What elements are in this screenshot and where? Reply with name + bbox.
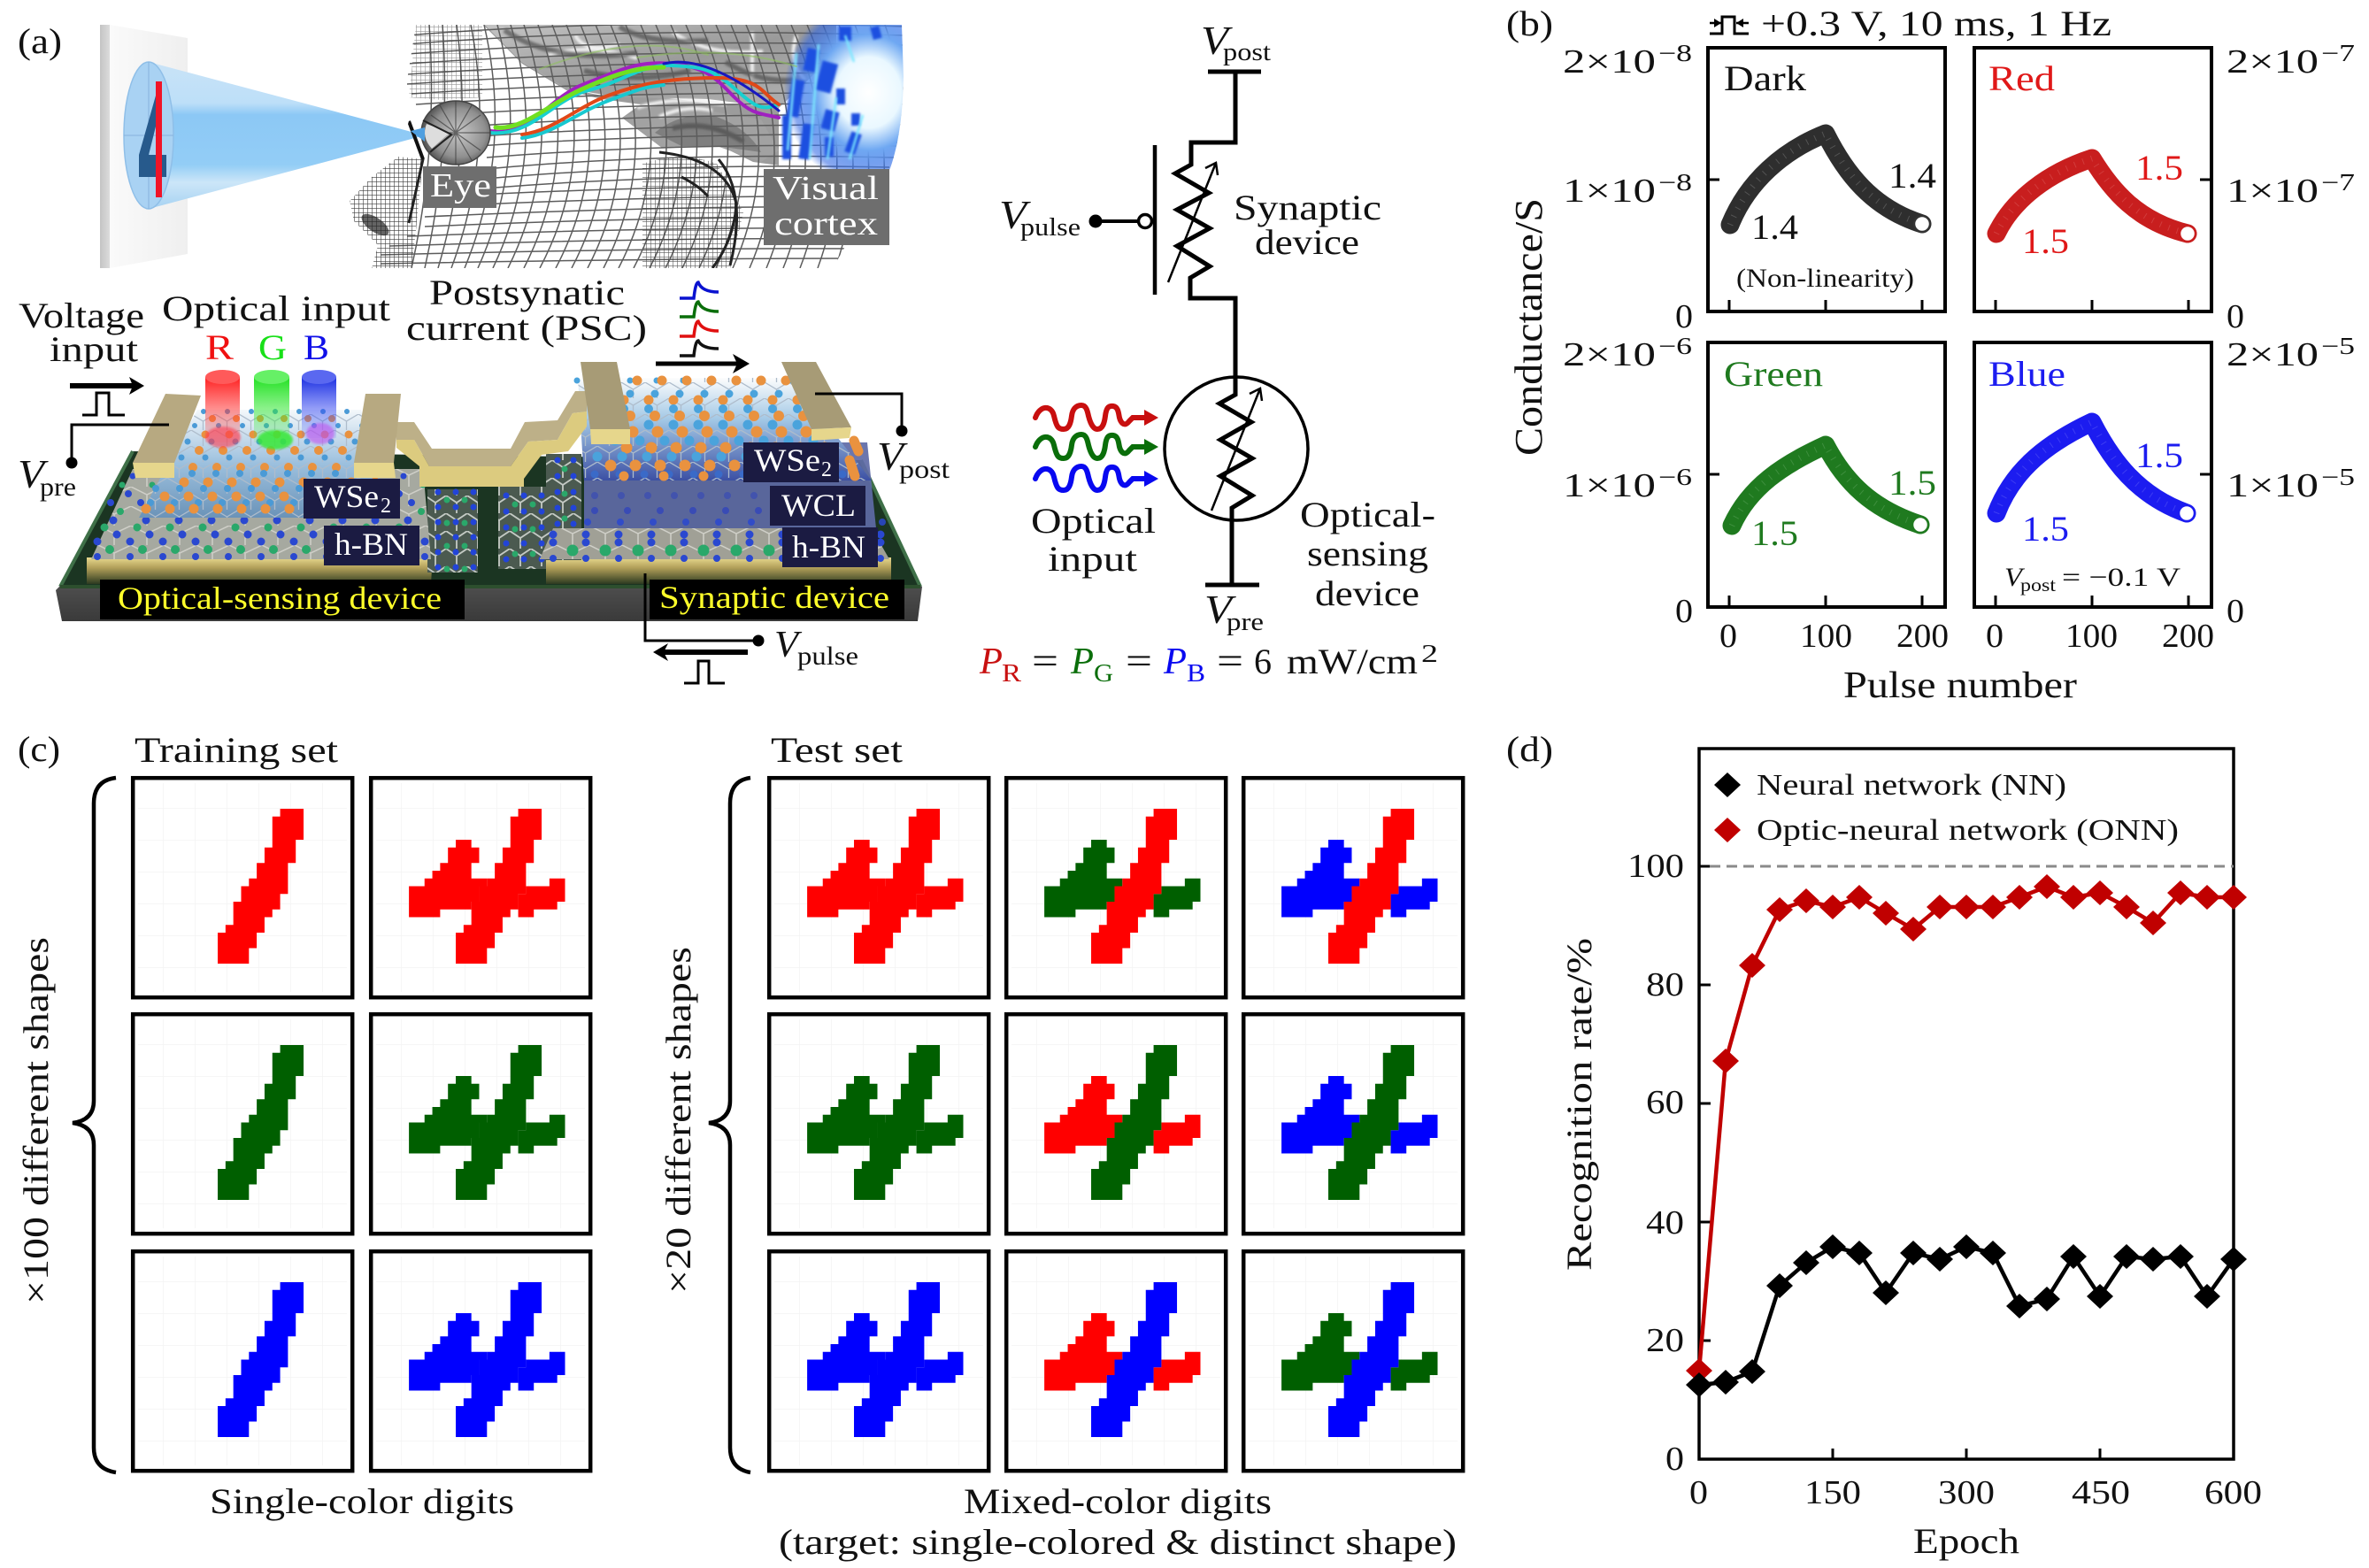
circuit label: Vpre (1204, 587, 1264, 636)
plot: Blue: = −0.1 V (2062, 563, 2181, 592)
right y tick labels: 1×10 (2227, 467, 2319, 504)
text: Voltage input (19, 296, 144, 369)
label: Visual cortex: Visual (773, 170, 879, 207)
legend (1714, 769, 2179, 847)
heading: Training set: Training set (135, 730, 338, 770)
x tick labels: 200 (1896, 618, 1949, 655)
all green (769, 1014, 988, 1234)
wire and label: Vpost: post (899, 455, 950, 484)
plot: Dark: 1.4 (1888, 156, 1936, 196)
x tick labels (1689, 1474, 2262, 1511)
left WSe2 lattice (139, 410, 389, 518)
brace: training (73, 778, 116, 1472)
label: Visual cortex: cortex (774, 205, 878, 242)
plot: Green: 1.5 (1888, 463, 1936, 503)
power formula: 2 (1421, 641, 1438, 668)
x tick labels: 600 (2204, 1474, 2262, 1511)
x tick labels: 0 (1689, 1474, 1708, 1511)
x tick labels: 0 (1986, 618, 2004, 655)
plot: Dark: (Non-linearity) (1736, 264, 1914, 293)
right y tick labels: −5 (2321, 464, 2355, 490)
caption: Mixed-color digits: Mixed-color digits (964, 1481, 1272, 1521)
left y tick labels: 2×10 (1563, 336, 1656, 373)
y tick labels: 100 (1627, 848, 1684, 885)
right y tick labels: −7 (2321, 169, 2355, 196)
circuit label: Vpre: pre (1227, 609, 1264, 636)
left y tick labels: 0 (1675, 593, 1693, 630)
text: Optical-sensing device: device (1315, 573, 1419, 613)
plot: Green: Green (1724, 354, 1823, 394)
red four (371, 778, 590, 997)
test set grid (769, 778, 1463, 1471)
arrow and pulse: voltage input (70, 377, 144, 415)
text: Optical input: input (1048, 539, 1137, 579)
text: Optical input with R G B: Optical input (162, 288, 390, 328)
x tick labels: 0 (1719, 618, 1737, 655)
power formula: = (1032, 642, 1058, 682)
blue one (133, 1251, 352, 1471)
panel (a): device illustration (18, 21, 950, 683)
wire, arrow and label: Vpulse: V (774, 625, 803, 665)
y tick labels: 80 (1646, 966, 1684, 1003)
y tick labels: 20 (1646, 1322, 1684, 1359)
panel label a: (a) (18, 21, 62, 61)
power formula: G (1094, 660, 1113, 688)
WSe2 left (304, 479, 400, 519)
plot: Dark: 1.4 (1751, 207, 1798, 247)
text: Postsynatic current (PSC) (406, 273, 647, 348)
chart frame and ticks (1699, 749, 2234, 1459)
pulse condition text: +0.3 V, 10 ms, 1 Hz (1761, 4, 2111, 43)
left y tick labels (1563, 40, 1693, 630)
WSe2 right: 2 (821, 458, 832, 481)
green over blue (1243, 1014, 1463, 1234)
left y tick labels: 1×10 (1563, 467, 1656, 504)
series: neural network (1686, 1234, 2247, 1397)
text: Optical input with R G B: R (205, 327, 234, 367)
device board (56, 451, 922, 621)
wire and label: Vpre: V (18, 451, 49, 496)
plot: Blue: 1.5 (2022, 509, 2069, 549)
text: Postsynatic current (PSC): Postsynatic (429, 273, 625, 312)
circuit label: Vpulse (999, 192, 1081, 242)
blue over red (1006, 1251, 1226, 1471)
red over green (1006, 778, 1226, 997)
blue four (371, 1251, 590, 1471)
WSe2 right: WSe (754, 442, 820, 478)
plot: Blue: Blue (1988, 354, 2065, 394)
y tick labels: 40 (1646, 1204, 1684, 1241)
right y tick labels: 0 (2227, 298, 2244, 335)
plot: Red: 1.5 (2135, 148, 2183, 188)
green one (133, 1014, 352, 1234)
label: Visual cortex (764, 169, 889, 245)
right y tick labels: −7 (2321, 40, 2355, 66)
plot: Red: Red (1988, 58, 2055, 98)
RGB light beams (205, 370, 336, 450)
plot: Blue: V (2004, 563, 2026, 592)
text: Optical input (1031, 501, 1156, 579)
power formula: P (1070, 642, 1094, 682)
text: Synaptic device (1234, 188, 1381, 262)
circuit label: Vpost: post (1223, 39, 1271, 66)
circuit label: Vpulse: V (999, 192, 1031, 237)
rotated label: x100 different shapes: ×100 different shapes (16, 937, 56, 1304)
panel label c: (c) (18, 729, 60, 769)
left y tick labels: 2×10 (1563, 43, 1656, 81)
y axis title: Recognition rate/% (1559, 938, 1599, 1271)
text: Synaptic device: device (1255, 222, 1359, 262)
red one (133, 778, 352, 997)
x tick labels: 300 (1938, 1474, 1995, 1511)
head wireframe with brain, eye and visual cortex (350, 24, 912, 268)
series: optic-neural network (1686, 874, 2247, 1383)
power formula: B (1187, 660, 1205, 688)
label: Optical-sensing device: Optical-sensing device (118, 580, 442, 616)
green over red (1006, 1014, 1226, 1234)
power formula: P (1163, 642, 1187, 682)
y axis title: Conductance/S (1507, 198, 1550, 456)
green four (371, 1014, 590, 1234)
right y tick labels: 2×10 (2227, 336, 2319, 373)
plot: Blue: post (2020, 574, 2056, 596)
WSe2 left: WSe (314, 479, 379, 514)
caption: target: (target: single-colored & distinct shape) (779, 1522, 1457, 1562)
gold electrodes (133, 362, 851, 478)
text: Optical input with R G B: B (304, 327, 329, 367)
x tick labels (1719, 618, 2214, 655)
WCL: WCL (781, 488, 856, 523)
material labels (304, 442, 878, 567)
wire, arrow and label: Vpulse (645, 573, 858, 683)
right y tick labels: 0 (2227, 593, 2244, 630)
right y tick labels: −5 (2321, 333, 2355, 359)
panel label b: (b) (1506, 4, 1553, 43)
wire and label: Vpost: V (877, 434, 908, 479)
power formula: R (1002, 660, 1021, 688)
screen showing digit 4 and light cone (100, 25, 425, 268)
brace: test (709, 778, 750, 1472)
wire and label: Vpre (18, 425, 169, 502)
all blue (769, 1251, 988, 1471)
x tick labels: 100 (2065, 618, 2118, 655)
x tick labels: 450 (2072, 1474, 2130, 1511)
PSC spike traces (680, 282, 719, 356)
label: Synaptic device: Synaptic device (659, 580, 889, 615)
plot: Green (1708, 342, 1945, 607)
power formula: = (1126, 642, 1152, 682)
plot: Dark (1708, 48, 1945, 311)
100 percent reference line (1710, 865, 2234, 867)
power formula: P (979, 642, 1003, 682)
synaptic transistor wiring (1088, 72, 1261, 585)
wire and label: Vpre: pre (40, 473, 76, 502)
heading: Test set: Test set (771, 730, 903, 770)
left y tick labels: 1×10 (1563, 173, 1656, 210)
right y tick labels: 2×10 (2227, 43, 2319, 81)
right lattice: WCL, h-BN and WSe2 (540, 378, 889, 559)
wire, arrow and label: Vpulse: pulse (797, 642, 858, 671)
wire and label: Vpost (815, 394, 950, 484)
legend: Optic-neural network (ONN) (1757, 814, 2179, 847)
x tick labels: 200 (2162, 618, 2214, 655)
all red (769, 778, 988, 997)
text: Optical-sensing device: Optical- (1300, 495, 1435, 534)
power formula (979, 641, 1438, 688)
pulse condition icon (1710, 17, 1749, 34)
left y tick labels: −8 (1658, 169, 1692, 196)
right y tick labels: 1×10 (2227, 173, 2319, 210)
rotated label: x20 different shapes: ×20 different shapes (658, 947, 698, 1294)
text: Optical input with R G B (162, 288, 390, 367)
text: Synaptic device: Synaptic (1234, 188, 1381, 227)
plot: Blue: 1.5 (2135, 435, 2183, 475)
eye (411, 101, 490, 165)
panel (c): digit datasets (16, 729, 1463, 1562)
optical sensor circle (1165, 377, 1308, 520)
panel label d: (d) (1506, 729, 1553, 769)
circuit label: Vpost: V (1201, 18, 1233, 63)
left y tick labels: −6 (1658, 464, 1692, 490)
text: Optical-sensing device: sensing (1307, 534, 1428, 573)
plot: Red: 1.5 (2022, 221, 2069, 261)
panel (b): conductance plots (1506, 4, 2355, 706)
training set grid (133, 778, 590, 1471)
center h-BN cross-sections (427, 454, 581, 573)
wavy light arrows (1035, 405, 1158, 490)
h-BN right (782, 527, 878, 567)
left y tick labels: −8 (1658, 40, 1692, 66)
x tick labels: 100 (1800, 618, 1852, 655)
plot: Red (1974, 48, 2211, 311)
circuit diagram (979, 18, 1438, 688)
label: Eye: Eye (430, 167, 491, 204)
left y tick labels: 0 (1675, 298, 1693, 335)
x tick labels: 150 (1804, 1474, 1861, 1511)
h-BN left: h-BN (335, 527, 408, 562)
arrow: PSC output (656, 354, 750, 373)
h-BN left (324, 526, 419, 565)
WCL (770, 486, 865, 526)
text: Postsynatic current (PSC): current (PSC) (406, 308, 647, 348)
h-BN right: h-BN (792, 529, 865, 565)
plot: Dark: Dark (1724, 58, 1806, 98)
power formula: mW/cm (1287, 642, 1418, 681)
left y tick labels: −6 (1658, 333, 1692, 359)
WSe2 right (743, 442, 839, 482)
x axis title: Pulse number (1843, 665, 2077, 706)
x axis title: Epoch (1913, 1521, 2019, 1561)
left h-BN lattice (91, 469, 431, 559)
text: Optical-sensing device (1300, 495, 1435, 613)
red over blue (1243, 778, 1463, 997)
right y tick labels (2227, 40, 2355, 630)
power formula: = (1217, 642, 1243, 682)
blue over green (1243, 1251, 1463, 1471)
y tick labels (1627, 848, 1684, 1478)
visual cortex glow (781, 25, 904, 170)
WSe2 left: 2 (381, 495, 391, 518)
text: Optical input with R G B: G (258, 327, 287, 367)
text: Voltage input: Voltage (19, 296, 144, 335)
legend: Neural network (NN) (1757, 769, 2066, 802)
text: Optical input: Optical (1031, 501, 1156, 541)
label: Eye (423, 166, 496, 208)
circuit label: Vpre: V (1204, 587, 1236, 632)
caption: Single-color digits: Single-color digits (210, 1481, 514, 1521)
power formula: 6 (1254, 642, 1272, 681)
circuit label: Vpost (1201, 18, 1271, 66)
plot: Blue (1974, 342, 2211, 607)
y tick labels: 0 (1665, 1441, 1684, 1478)
plot: Green: 1.5 (1751, 513, 1798, 553)
circuit label: Vpulse: pulse (1020, 214, 1081, 242)
y tick labels: 60 (1646, 1084, 1684, 1121)
panel (d): recognition rate chart (1506, 729, 2262, 1561)
optic nerves (490, 46, 796, 138)
text: Voltage input: input (50, 329, 138, 369)
gold connecting wire (396, 391, 587, 487)
